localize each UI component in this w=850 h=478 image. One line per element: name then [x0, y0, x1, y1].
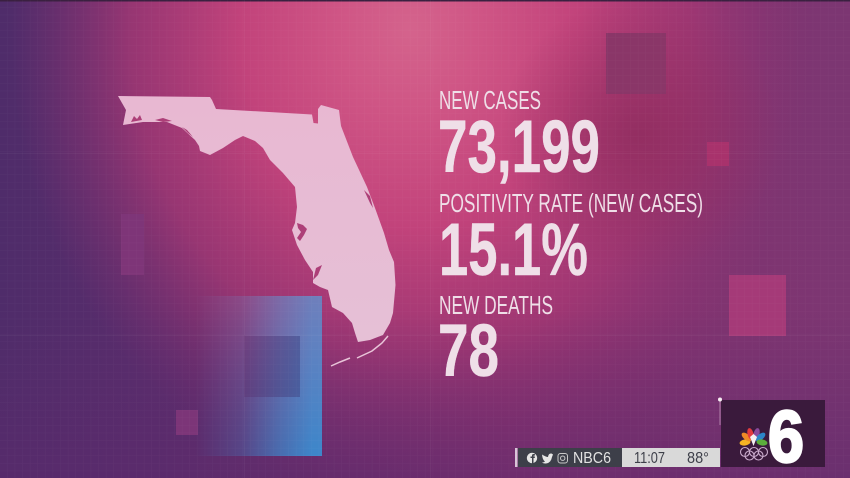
map of Florida: [118, 96, 396, 366]
stat: new cases: [438, 85, 600, 188]
stat: new deaths: 78: [438, 309, 499, 392]
temperature: 88°: [687, 450, 709, 467]
stat: new cases: NEW CASES: [439, 85, 541, 115]
stat: positivity rate: [439, 188, 703, 291]
stat: new cases: 73,199: [438, 105, 600, 188]
stat: positivity rate: 15.1%: [439, 208, 588, 291]
sparkle: [718, 398, 722, 425]
ticker bar: [515, 448, 720, 467]
blue gradient square: [210, 296, 322, 456]
decorative squares: [121, 33, 786, 435]
bays: [131, 115, 373, 280]
keys: [331, 336, 388, 366]
olympic rings: [740, 448, 768, 460]
handle: NBC6: [573, 450, 611, 467]
social icons: [527, 453, 568, 464]
time: 11:07: [634, 450, 665, 467]
stat: positivity rate: POSITIVITY RATE (NEW CASES): [439, 188, 703, 218]
stat: new deaths: NEW DEATHS: [439, 290, 553, 320]
logo: NBC6: [718, 397, 825, 478]
stat: new deaths: [438, 290, 553, 392]
numeral 6: 6: [768, 397, 804, 478]
peacock: [739, 427, 768, 446]
